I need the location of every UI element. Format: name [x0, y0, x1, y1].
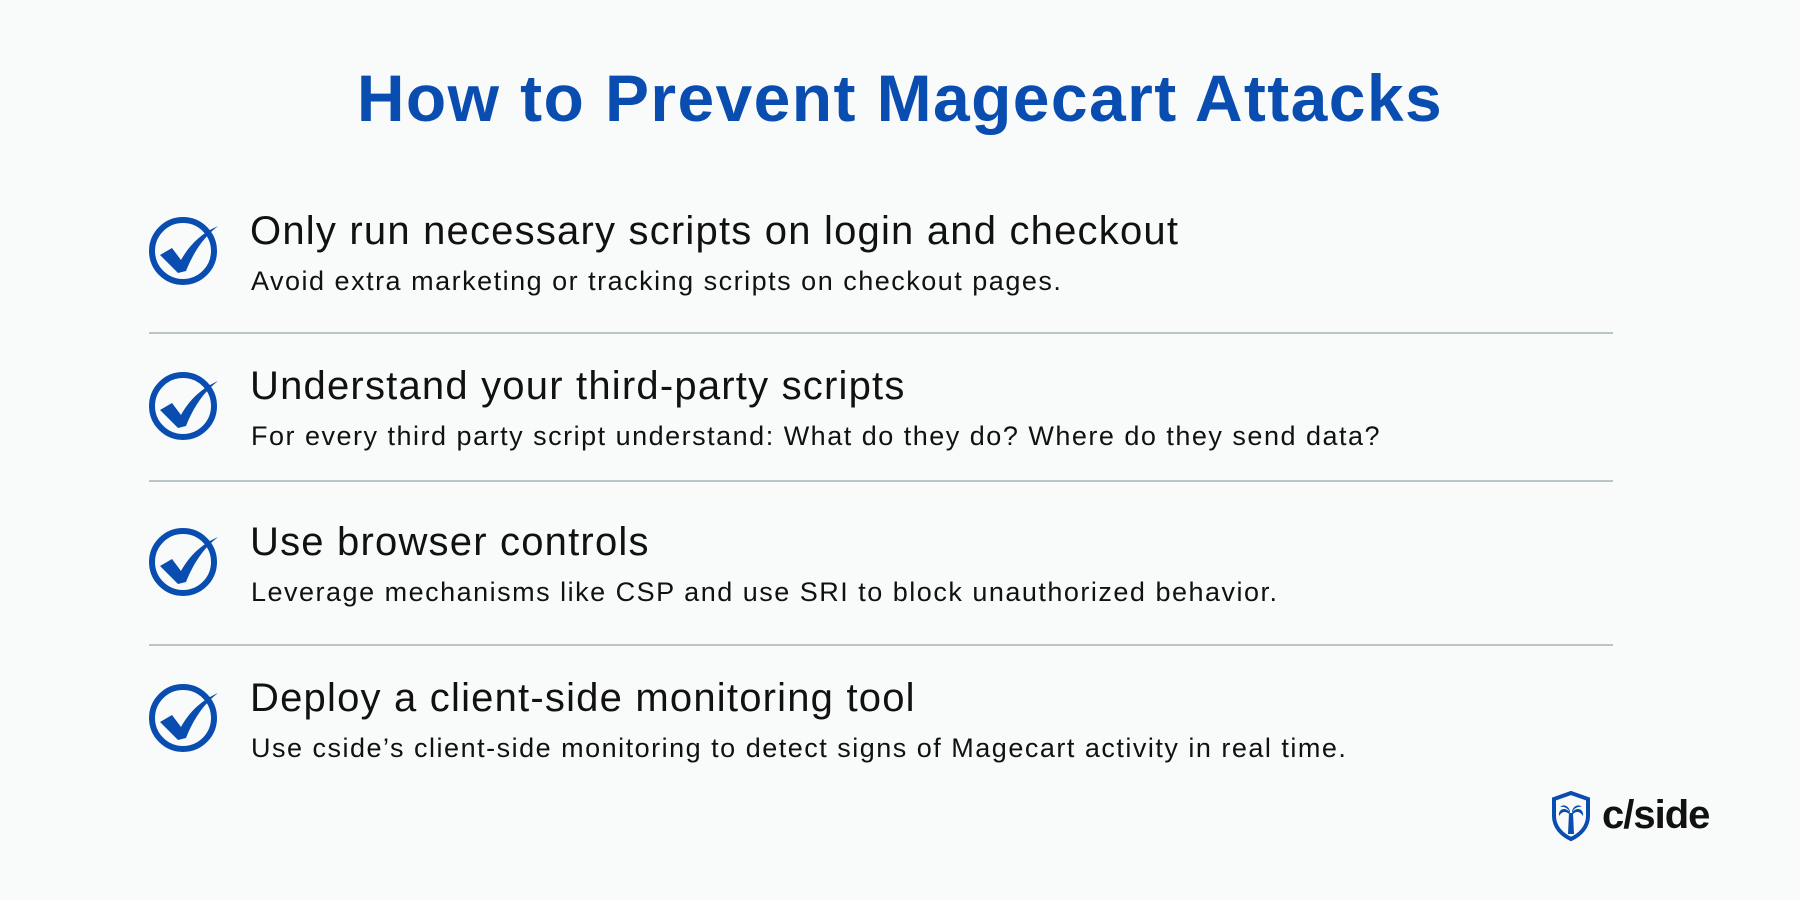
- heading 4: Deploy a client-side monitoring tool: [250, 676, 916, 720]
- icon: check: [149, 372, 218, 440]
- heading 1: Only run necessary scripts on login and checkout: [250, 209, 1179, 253]
- text 1: Avoid extra marketing or tracking scripts on checkout pages.: [251, 266, 1062, 296]
- item 4: [149, 676, 1347, 763]
- icon: check: [149, 528, 218, 596]
- logo: cside: [1552, 790, 1709, 842]
- item 3: [149, 520, 1279, 607]
- heading 3: Use browser controls: [250, 520, 650, 564]
- icon: check: [149, 684, 218, 752]
- icon: shield palm: [1552, 790, 1590, 842]
- title: How to Prevent Magecart Attacks: [357, 61, 1443, 135]
- item 1: [149, 209, 1179, 296]
- item 2: [149, 364, 1381, 451]
- text 3: Leverage mechanisms like CSP and use SRI to block unauthorized behavior.: [251, 577, 1279, 607]
- text 4: Use cside’s client-side monitoring to detect signs of Magecart activity in real time.: [251, 733, 1347, 763]
- icon: check: [149, 217, 218, 285]
- heading 2: Understand your third-party scripts: [250, 364, 906, 408]
- logo text: c/side: [1602, 793, 1709, 837]
- text 2: For every third party script understand: What do they do? Where do they send data?: [251, 421, 1381, 451]
